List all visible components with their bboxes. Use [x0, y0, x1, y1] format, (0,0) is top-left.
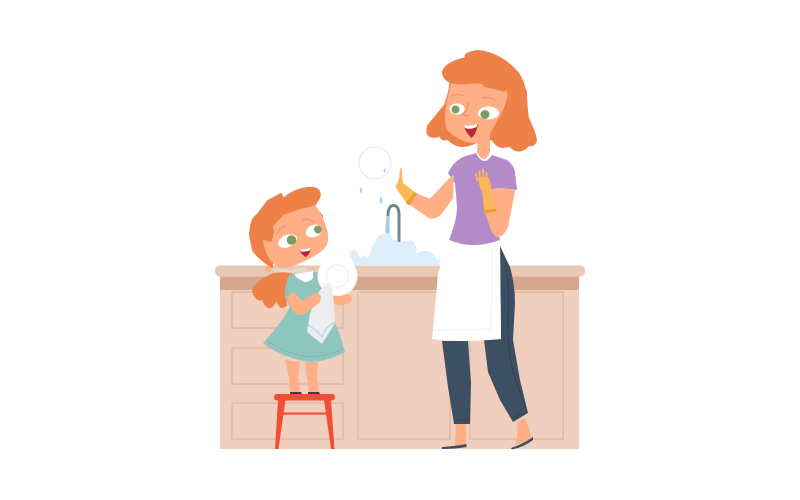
mother's raised arm — [409, 176, 453, 218]
pigtail — [253, 273, 291, 307]
red stool — [274, 394, 335, 449]
girl's legs — [285, 360, 319, 392]
face — [263, 204, 328, 268]
legs and shoes — [442, 418, 533, 450]
girl's arm — [287, 291, 320, 314]
navy trousers — [442, 246, 528, 424]
white apron — [432, 245, 501, 341]
mouth — [464, 123, 478, 138]
mouth — [300, 248, 311, 257]
girl — [250, 188, 358, 394]
kitchen counter — [215, 266, 585, 449]
back hair — [250, 188, 322, 267]
eyes — [450, 104, 499, 120]
raised glove cuff — [406, 192, 417, 206]
fringe tuft — [259, 197, 313, 241]
shoes — [290, 392, 320, 394]
back hair — [427, 70, 536, 150]
yellow raised glove — [396, 168, 417, 206]
eyes — [276, 222, 324, 250]
white plate — [318, 256, 358, 296]
mother's arm on chest — [485, 189, 514, 236]
eyebrows — [277, 219, 313, 234]
neck — [477, 132, 490, 159]
eyebrows and nose — [452, 94, 495, 116]
dress sleeve — [285, 274, 304, 298]
soap bubble and water drops — [359, 147, 391, 204]
face — [445, 80, 508, 143]
teal dress — [263, 272, 345, 362]
white collar — [295, 271, 313, 282]
sink foam and faucet — [349, 206, 441, 265]
glove cuff — [484, 208, 496, 214]
dish towel — [307, 283, 335, 344]
ear — [265, 266, 271, 272]
mother — [396, 51, 536, 450]
yellow glove on chest — [476, 170, 496, 214]
fringe — [443, 51, 525, 93]
girl's far hand — [330, 293, 352, 305]
purple shirt — [448, 153, 517, 245]
neck strap — [272, 267, 310, 273]
